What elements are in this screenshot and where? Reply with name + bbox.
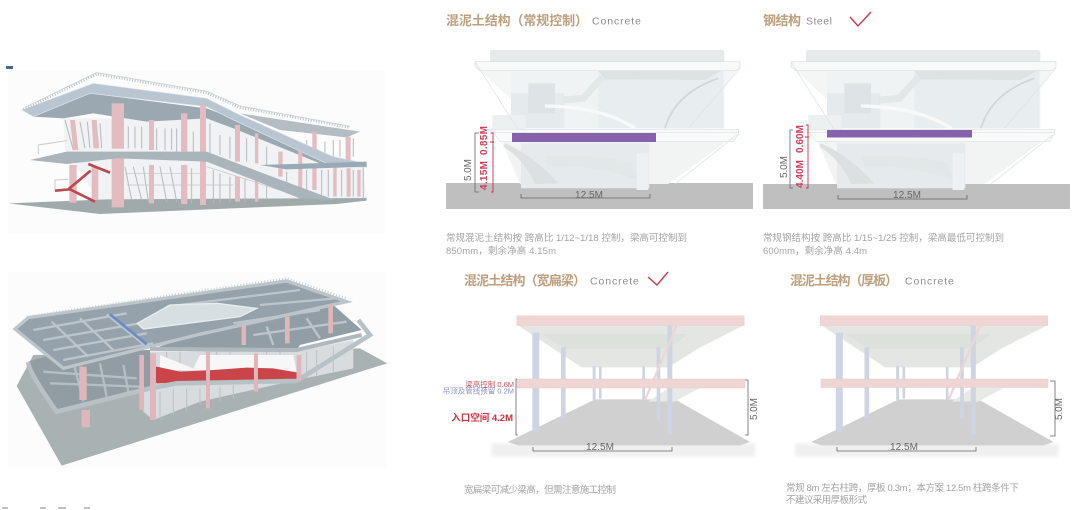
icon: check mark	[850, 12, 871, 26]
panel: steel	[763, 12, 1070, 257]
body text: 常规混泥土结构按 跨高比 1/12~1/18 控制，梁高可控制到	[446, 232, 687, 244]
heading: steel: 钢结构	[763, 13, 801, 28]
roof front edge	[15, 281, 347, 368]
label: beam depth: 0.60M	[795, 125, 806, 153]
section drawing	[475, 50, 740, 190]
label: services zone: 吊顶及管线预留 0.2M	[443, 386, 514, 396]
roof slab edge	[22, 83, 367, 167]
icon: check mark	[648, 272, 668, 285]
body text: 宽扁梁可减少梁高，但需注意施工控制	[464, 484, 616, 496]
beam depth bar	[512, 133, 656, 142]
label: beam depth: 梁高控制 0.6M	[465, 379, 514, 389]
label: span: 12.5M	[893, 190, 921, 201]
section drawing	[791, 50, 1056, 190]
label: total height: 5.0M	[1054, 398, 1065, 420]
frame drawing	[492, 316, 755, 457]
frame drawing	[795, 316, 1058, 457]
dimension lines	[837, 381, 1055, 451]
label: clear height: 4.40M	[795, 160, 806, 188]
roof soffit	[33, 93, 337, 165]
roof railing	[23, 74, 350, 127]
dimension lines	[516, 379, 748, 451]
roof railing	[27, 278, 347, 317]
heading latin: Concrete: Concrete	[590, 276, 640, 288]
label: total height: 5.0M	[779, 156, 790, 178]
heading latin: Steel: Steel	[806, 16, 833, 28]
building model: aerial perspective	[8, 272, 387, 468]
columns	[79, 352, 301, 427]
body text line 2: 850mm，剩余净高 4.15m	[446, 245, 556, 257]
lower deck	[28, 350, 150, 413]
ground plate	[8, 198, 367, 214]
red stair	[55, 164, 110, 202]
roof deck	[15, 281, 347, 368]
label: total height: 5.0M	[463, 159, 474, 181]
lower deck edge	[28, 320, 370, 412]
roof grid	[33, 290, 347, 360]
red dimension line	[805, 125, 809, 188]
label: beam depth: 0.85M	[479, 126, 490, 155]
heading latin: Concrete: Concrete	[905, 276, 955, 288]
heading latin: Concrete: Concrete	[592, 16, 642, 28]
beam depth bar	[827, 130, 972, 138]
panel: concrete conventional	[446, 13, 753, 257]
ground block	[763, 184, 1070, 209]
label: span: 12.5M	[575, 190, 603, 201]
label: span: 12.5M	[890, 442, 918, 453]
upper columns	[242, 305, 333, 345]
stray marks at lower left	[2, 507, 90, 509]
heading: concrete conventional: 混泥土结构（常规控制）	[446, 13, 588, 28]
label: span: 12.5M	[586, 442, 614, 453]
interior glass volume	[143, 340, 353, 420]
building model: side perspective	[8, 70, 385, 233]
body text line 2: 不建议采用厚板形式	[786, 494, 867, 506]
skylight	[137, 303, 257, 329]
label: entrance space: 入口空间 4.2M	[451, 412, 513, 424]
ground block	[446, 183, 753, 209]
small legend marker	[6, 66, 13, 69]
ground plate	[17, 348, 387, 466]
upper right deck	[150, 305, 362, 350]
heading: wide flat beam: 混泥土结构（宽扁梁）	[464, 273, 586, 288]
red dimension line	[490, 133, 494, 192]
columns	[69, 103, 361, 207]
dimension lines	[790, 130, 967, 199]
mid thin slab	[821, 379, 1048, 388]
red stair band	[143, 365, 297, 383]
body text: 常规钢结构按 跨高比 1/15~1/25 控制，梁高最低可控制到	[763, 232, 1004, 244]
second floor slab and ramp	[30, 152, 335, 200]
body text line 2: 600mm，剩余净高 4.4m	[763, 245, 867, 257]
label: total height: 5.0M	[749, 398, 760, 420]
heading: thick slab: 混泥土结构（厚板）	[790, 273, 898, 288]
panel: concrete thick slab	[786, 273, 1065, 506]
glass volume	[63, 118, 367, 202]
mid slab deep beam	[517, 379, 745, 388]
dimension lines	[475, 133, 650, 198]
panel: concrete wide flat beam	[443, 272, 760, 496]
second floor railing	[38, 141, 68, 190]
label: clear height: 4.15M	[479, 161, 490, 190]
glass curtain	[65, 120, 363, 203]
body text: 常规 8m 左右柱跨，厚板 0.3m；本方案 12.5m 柱跨条件下	[786, 482, 1019, 494]
